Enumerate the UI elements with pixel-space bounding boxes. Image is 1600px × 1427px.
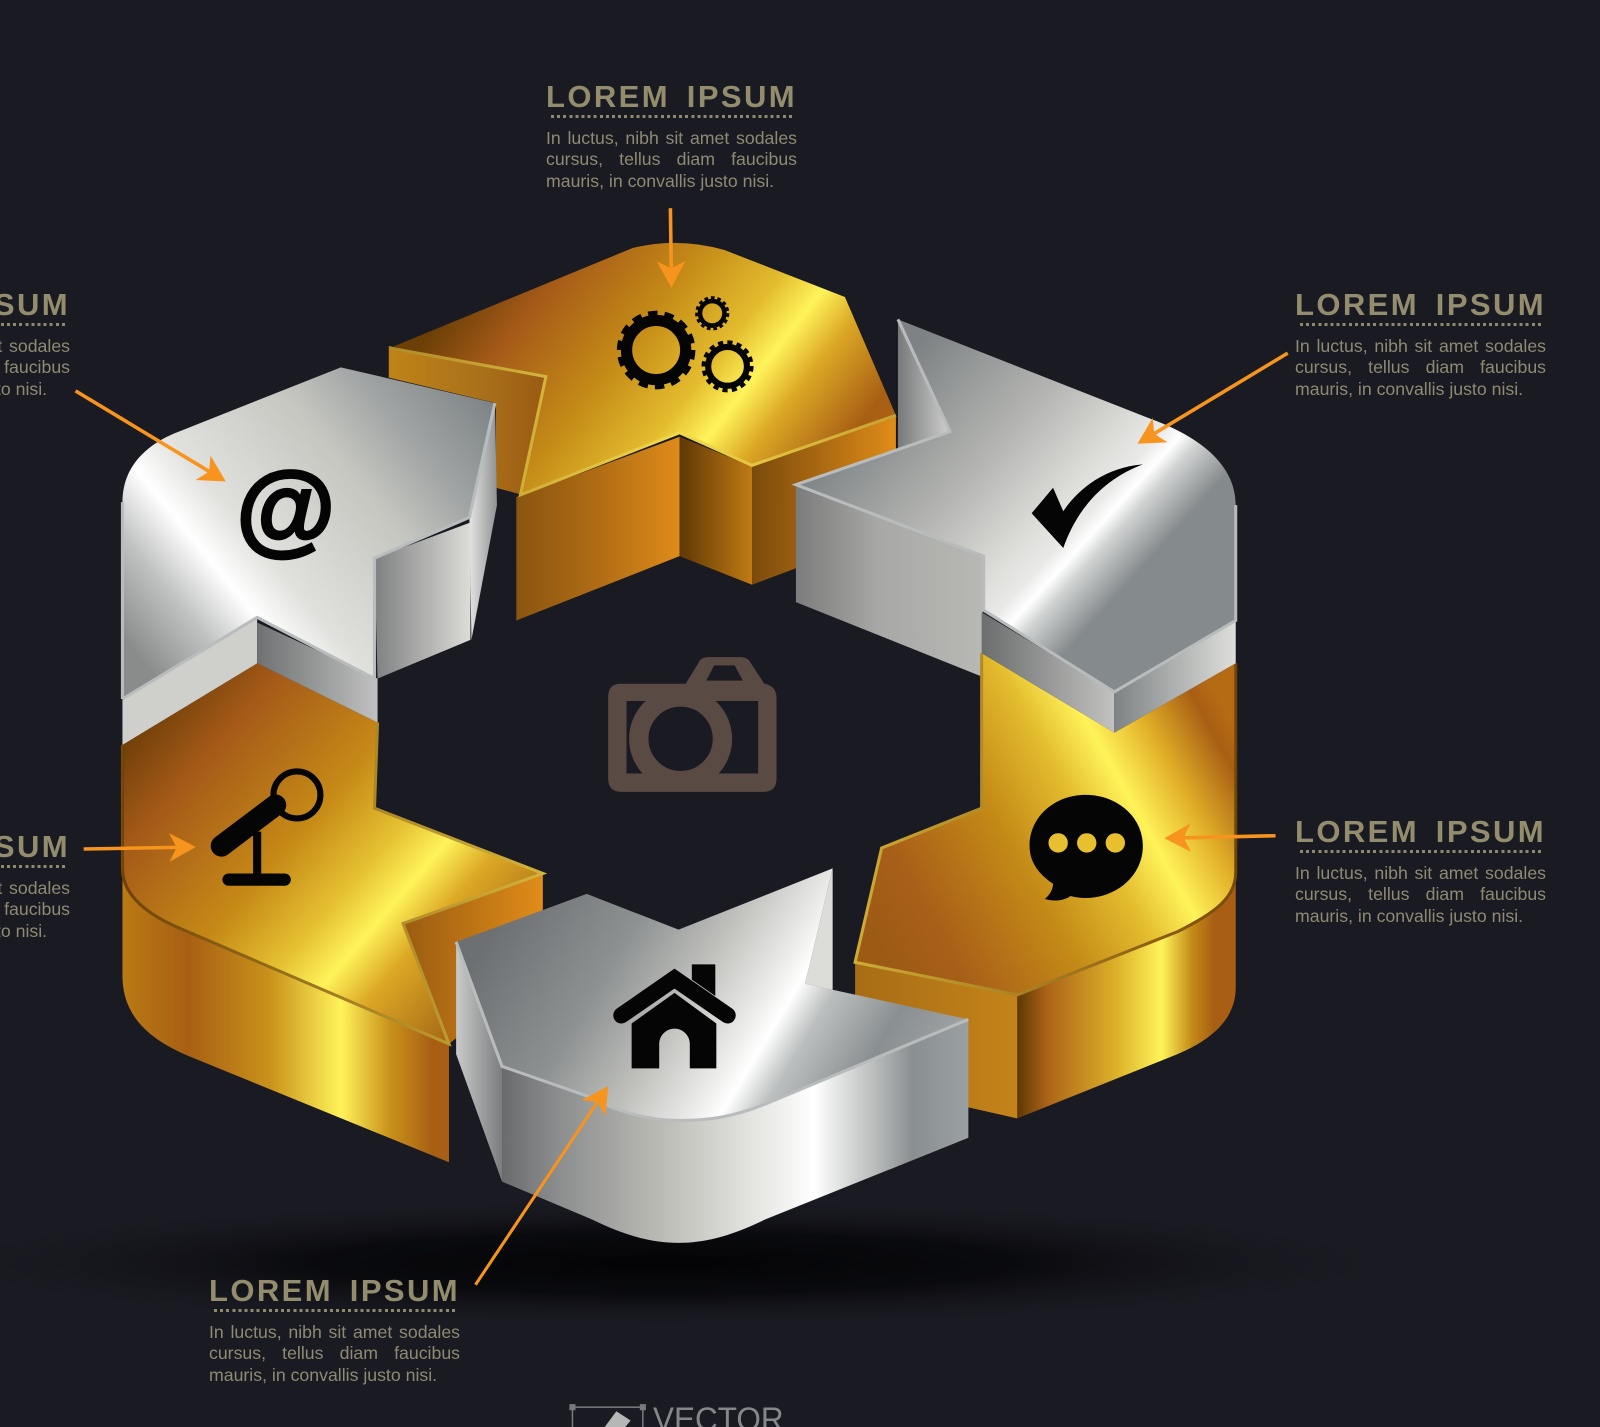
body text (0, 336, 70, 399)
top face of gold segment (855, 653, 1236, 995)
arrow: top callout (669, 208, 673, 268)
body text: In luctus, nibh sit amet sodales (1295, 336, 1546, 356)
top face of silver segment (796, 319, 1236, 692)
body text: In luctus, nibh sit amet sodales (209, 1322, 460, 1342)
arrow: upper left callout (76, 391, 209, 471)
arrow: bottom callout (476, 1102, 597, 1285)
front face of gold segment (122, 868, 449, 1162)
body text: cursus, tellus diam faucibus (1295, 884, 1546, 904)
body text: mauris, in convallis justo nisi. (546, 171, 774, 191)
heading: LOREM IPSUM (209, 1273, 460, 1308)
body text (546, 128, 797, 191)
icon: check mark (1032, 464, 1143, 548)
side faces of silver segment (456, 868, 968, 1243)
heading: LOREM IPSUM (1295, 814, 1546, 849)
body text: cursus, tellus diam faucibus (1295, 357, 1546, 377)
body text: mauris, in convallis justo nisi. (1295, 379, 1523, 399)
arrow: lower right callout (1184, 836, 1276, 838)
floor shadow (0, 1196, 1439, 1331)
top face of silver segment (456, 868, 968, 1120)
icon: at sign: @ (236, 451, 335, 565)
icon: speech bubble (1030, 795, 1143, 900)
side faces of gold segment (855, 872, 1236, 1118)
watermark (569, 1402, 784, 1427)
body text (0, 878, 70, 941)
text block: top (546, 79, 797, 191)
lower strip of silver segment (982, 612, 1236, 733)
heading: LOREM IPSUM (1295, 287, 1546, 322)
panel: right gold speech segment (855, 653, 1236, 1118)
text block: bottom (209, 1273, 460, 1385)
top face of gold arrow (390, 243, 896, 495)
icon: central camera (608, 657, 777, 792)
body text: mauris, in convallis justo nisi. (209, 1365, 437, 1385)
panel: top gold arrow segment (389, 243, 896, 620)
arrow: lower left callout (84, 847, 177, 849)
panel: silver check segment side faces (796, 319, 984, 677)
top face of silver segment (122, 367, 495, 699)
text block: lower right (1295, 814, 1546, 926)
body text: mauris, in convallis justo nisi. (1295, 906, 1523, 926)
text block: lower left (0, 829, 70, 941)
body text (209, 1322, 460, 1385)
side faces of silver segment (122, 403, 497, 745)
arrow: upper right callout (1154, 353, 1288, 434)
text block: upper left (0, 287, 70, 399)
front faces of gold arrow (516, 415, 896, 620)
icon: house (621, 964, 728, 1068)
panel: left silver at-sign segment (122, 367, 497, 745)
panel: right silver check segment (796, 319, 1236, 733)
body text: cursus, tellus diam faucibus (209, 1343, 460, 1363)
body text: In luctus, nibh sit amet sodales (1295, 863, 1546, 883)
panel: left gold microphone segment (122, 663, 543, 1162)
icon: microphone (221, 771, 320, 880)
text block: upper right (1295, 287, 1546, 399)
panel: bottom silver house segment (456, 868, 968, 1243)
body text: cursus, tellus diam faucibus (546, 149, 797, 169)
heading: LOREM IPSUM (546, 79, 797, 114)
body text: In luctus, nibh sit amet sodales (546, 128, 797, 148)
rear block of gold arrow (389, 346, 546, 495)
body text (1295, 863, 1546, 926)
body text (1295, 336, 1546, 399)
inner face of gold segment (403, 875, 543, 1044)
icon: gears (620, 298, 751, 390)
top face of gold segment (122, 663, 543, 1044)
